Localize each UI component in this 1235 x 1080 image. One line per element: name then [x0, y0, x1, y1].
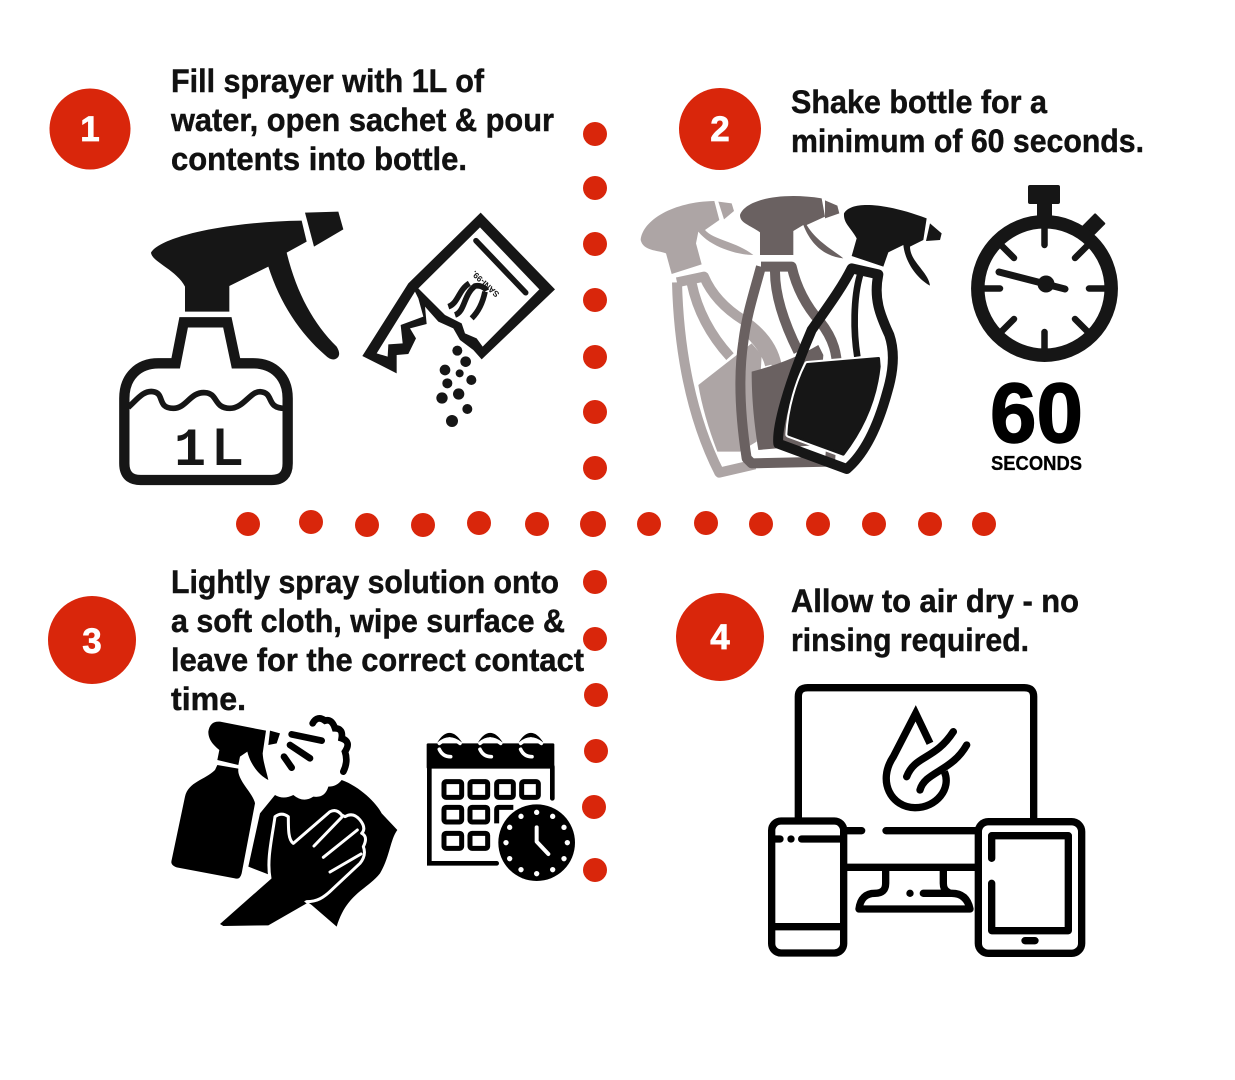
dotted divider: vertical and horizontal red dots: [236, 122, 996, 882]
step 1 heading: [170, 63, 554, 177]
step 3 heading: time.: [171, 681, 246, 717]
step 3 heading: [171, 564, 584, 717]
step 1 heading: water, open sachet & pour: [170, 102, 554, 138]
icon: calendar with clock: [427, 735, 576, 882]
panel: step 2: [641, 84, 1144, 475]
step 2 heading: minimum of 60 seconds.: [791, 123, 1144, 159]
step 2 number badge: [679, 88, 761, 170]
step 3 number badge: [48, 596, 136, 684]
light grey bottle: [641, 201, 777, 473]
panel: step 1: [50, 63, 555, 482]
step 4 number badge: [676, 593, 764, 681]
step 3 heading: Lightly spray solution onto: [171, 564, 559, 600]
icon: stopwatch: [978, 185, 1111, 355]
icon: three spray bottles shaking: [641, 196, 942, 473]
step 4 heading: [791, 583, 1079, 658]
black bottle: [778, 205, 942, 469]
step 2 heading: Shake bottle for a: [791, 84, 1047, 120]
step 3 number badge: 3: [82, 622, 102, 661]
panel: step 3: [48, 564, 584, 927]
step 4 heading: rinsing required.: [791, 622, 1029, 658]
label: 60 seconds: 60: [990, 366, 1083, 460]
label: 60 seconds: SECONDS: [991, 453, 1082, 475]
step 2 heading: [791, 84, 1144, 159]
step 4 heading: Allow to air dry - no: [791, 583, 1079, 619]
step 1 number badge: 1: [80, 110, 100, 149]
step 3 heading: a soft cloth, wipe surface &: [171, 603, 565, 639]
icon: torn sachet pouring powder: [362, 213, 555, 427]
step 4 number badge: 4: [710, 618, 730, 657]
step 1 heading: Fill sprayer with 1L of: [171, 63, 484, 99]
step 1 number badge: [50, 88, 130, 170]
step 3 heading: leave for the correct contact: [171, 642, 584, 678]
icon: spray bottle with 1 litre of water: L: [213, 418, 243, 477]
icon: torn sachet pouring powder: SANI-99.: [469, 269, 501, 300]
icon: hand wiping with cloth and spray bottle: [171, 718, 397, 927]
mid grey bottle: [740, 196, 843, 463]
step 2 number badge: 2: [710, 110, 730, 149]
icon: spray bottle with 1 litre of water: [124, 212, 343, 482]
icon: spray bottle with 1 litre of water: 1: [174, 422, 206, 482]
panel: step 4: [676, 583, 1082, 953]
icon: monitor, phone and tablet with water-repellent drop: [772, 688, 1082, 953]
step 1 heading: contents into bottle.: [171, 141, 467, 177]
